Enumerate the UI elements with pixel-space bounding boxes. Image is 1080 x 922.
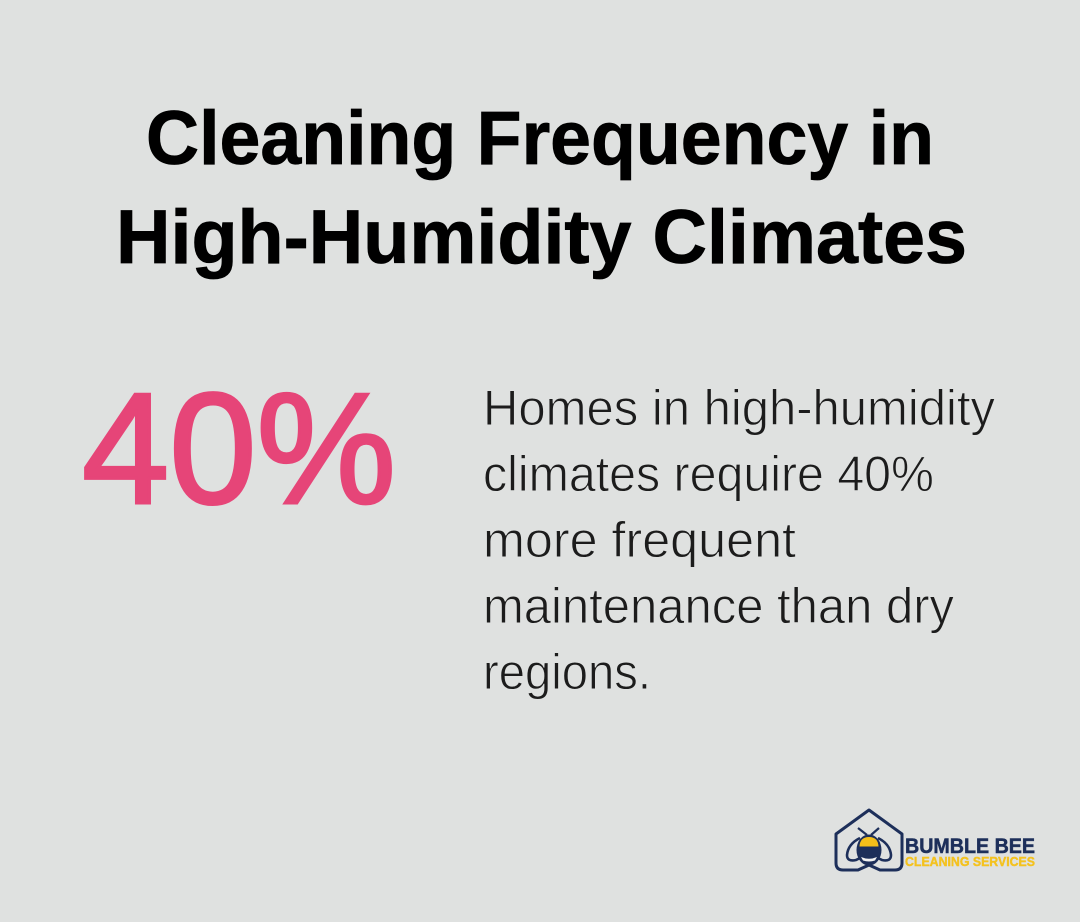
description text: climates require 40% (483, 446, 934, 502)
logo wordmark: BUMBLE BEE (905, 835, 1035, 858)
title: Cleaning Frequency in (146, 96, 934, 181)
description text: maintenance than dry (483, 578, 954, 634)
logo tagline: CLEANING SERVICES (905, 855, 1035, 869)
title: High-Humidity Climates (116, 195, 967, 280)
big statistic: 40%: 40% (82, 361, 396, 537)
description text: Homes in high-humidity (483, 380, 995, 436)
description text: more frequent (483, 512, 796, 568)
title (116, 96, 967, 280)
logo: Bumble Bee Cleaning Services (836, 810, 1035, 870)
description text (483, 380, 995, 700)
description text: regions. (483, 644, 651, 700)
icon: house with bee (836, 810, 902, 870)
